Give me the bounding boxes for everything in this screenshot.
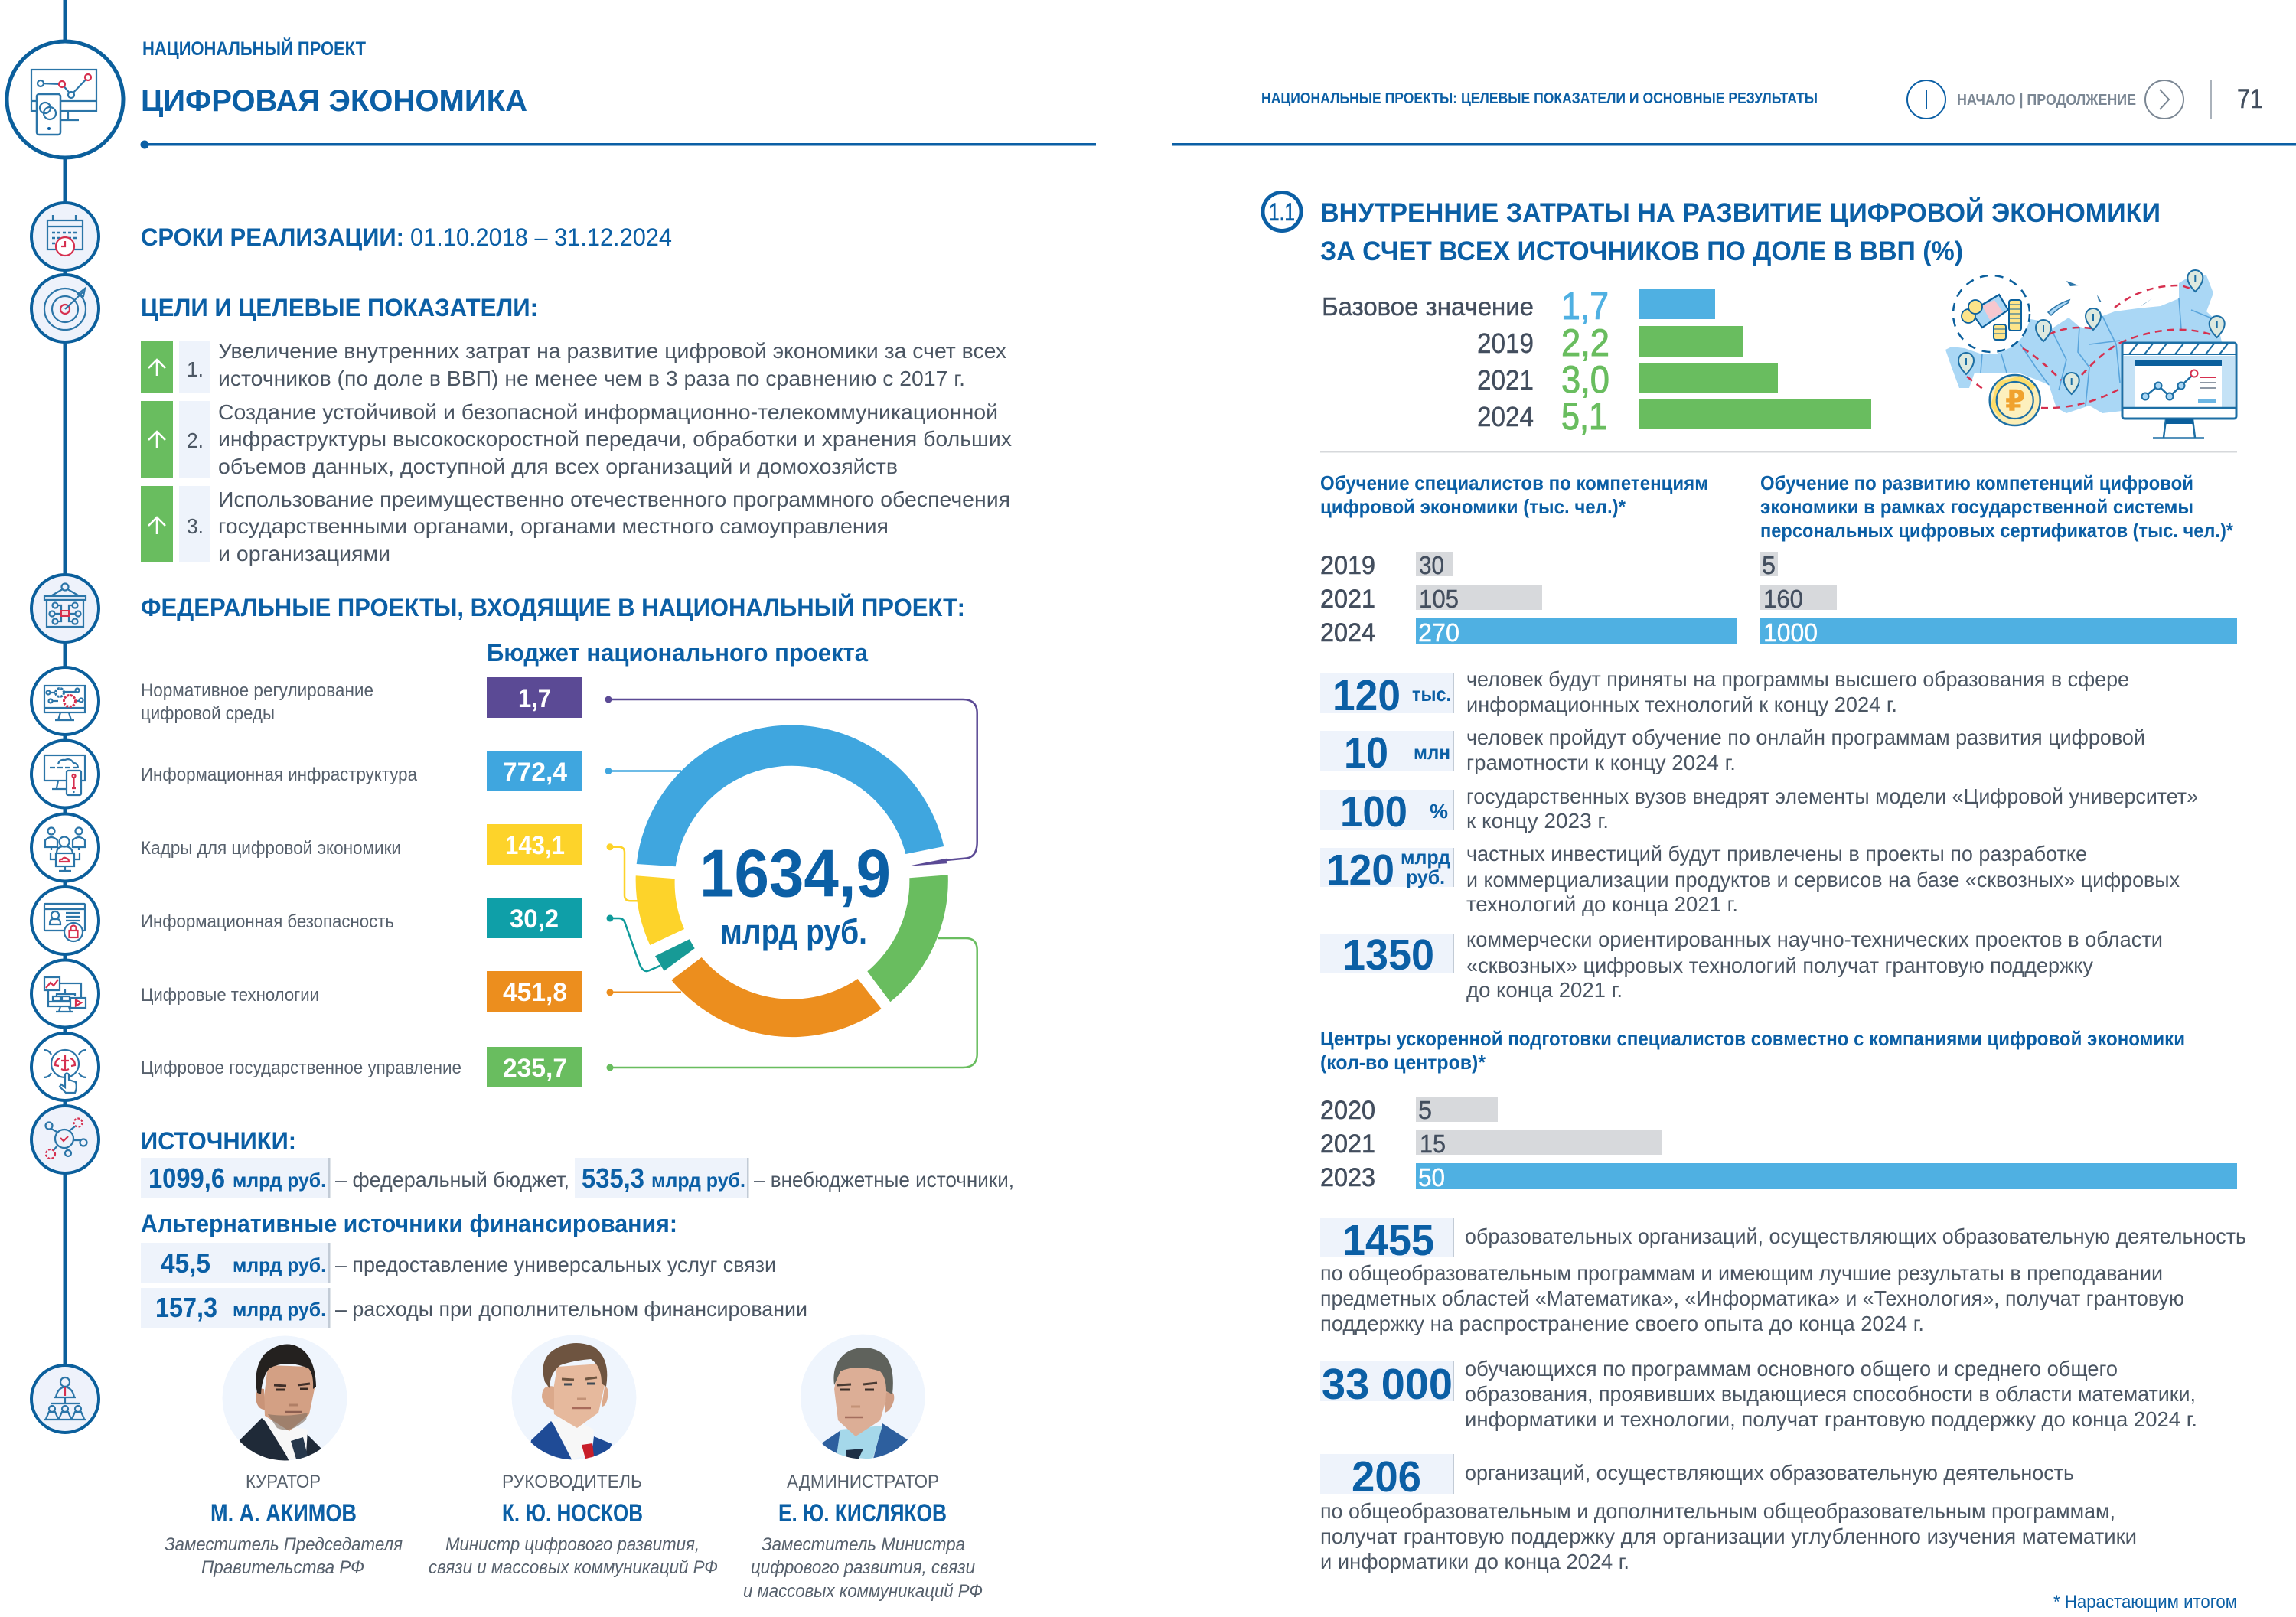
curator: М. А. АКИМОВ [210,1499,357,1527]
stat: 120 thousand: 120 [1332,671,1401,720]
stat: 1455: по общеобразовательным программам и имеющим лучшие результаты в преподавании [1320,1261,2163,1285]
sources row: млрд руб. [651,1169,745,1192]
stat: 100 percent: государственных вузов внедрят элементы модели «Цифровой университет» [1466,784,2198,808]
portrait: Akimov [222,1336,347,1462]
heading: implementation period: СРОКИ РЕАЛИЗАЦИИ: [141,223,404,251]
bar chart: share of GDP: 2024 [1477,401,1534,432]
stat: 206 [1320,1452,2137,1573]
stat: 1350: «сквозных» цифровых технологий получат грантовую поддержку [1466,954,2093,977]
stat: 120 billion: млрд [1401,846,1450,869]
connectors [605,696,977,1071]
head of project: РУКОВОДИТЕЛЬ [502,1472,642,1492]
illustration: map of Russia with monitor: ₽ [2005,384,2025,418]
page header right: НАЧАЛО | ПРОДОЛЖЕНИЕ [1957,92,2136,109]
chart heading: specialists training [1320,471,1708,518]
project labels: Цифровые технологии [141,985,319,1006]
alternative source 1: млрд руб. [233,1254,326,1276]
stat: 10 million: млн [1414,741,1450,764]
stat: 10 million: человек пройдут обучение по онлайн программам развития цифровой [1466,725,2145,749]
head of project: Министр цифрового развития, [445,1534,700,1555]
curator: Правительства РФ [201,1557,364,1578]
bar chart: specialists: 105 [1419,585,1459,613]
budget value boxes: 235,7 [503,1054,567,1083]
goal 2: Создание устойчивой и безопасной информационно-телекоммуникационной [218,400,998,424]
sources row: 535,3 [582,1162,644,1194]
heading: budget: Бюджет национального проекта [487,639,868,667]
project labels: Информационная безопасность [141,911,394,932]
bar chart: share of GDP: 5,1 [1561,395,1607,438]
bar chart: centres: 50 [1418,1163,1445,1192]
stat: 206: 206 [1352,1452,1421,1501]
bar chart: certificates: 5 [1762,551,1776,579]
footnote: * Нарастающим итогом [2053,1592,2237,1612]
stat: 100 percent [1320,784,2198,836]
stat: 100 percent: % [1430,800,1448,823]
budget value boxes: 30,2 [510,905,559,934]
administrator: цифрового развития, связи [751,1557,975,1578]
bar chart: specialists: 30 [1419,551,1444,579]
donut total: 1634,9 [700,836,891,911]
sources row: – внебюджетные источники, [754,1168,1014,1192]
budget value boxes: 772,4 [503,758,567,787]
alternative source 2: – расходы при дополнительном финансировании [335,1297,807,1321]
stat: 120 billion: и коммерциализации продуктов и сервисов на базе «сквозных» цифровых [1466,868,2180,892]
icon: regulation monitor [31,667,99,735]
bar chart: share of GDP: 2019 [1477,328,1534,359]
administrator: Е. Ю. КИСЛЯКОВ [778,1499,947,1527]
stat: 33 000: образования, проявивших выдающиеся способности в области математики, [1465,1382,2196,1406]
project labels: Нормативное регулирование [141,680,373,701]
head of project: связи и массовых коммуникаций РФ [429,1557,718,1578]
budget value boxes: 1,7 [518,684,551,713]
chart heading: certificates: Обучение по развитию компетенций цифровой [1760,471,2193,494]
alternative source 1: 45,5 [161,1247,210,1279]
stat: 206: и информатики до конца 2024 г. [1320,1550,1629,1573]
bar chart: specialists: 2024 [1320,618,1375,647]
bar chart: share of GDP: 3,0 [1561,358,1609,401]
bar chart: centres: 2021 [1320,1130,1375,1159]
bar chart: share of GDP: 2,2 [1561,321,1609,364]
head of project: К. Ю. НОСКОВ [502,1499,643,1527]
page header right [1172,80,2296,145]
bar chart: share of GDP: Базовое значение [1322,292,1534,321]
stat: 206: по общеобразовательным и дополнительным общеобразовательным программам, [1320,1499,2115,1523]
bar chart: centres: 2023 [1320,1163,1375,1192]
project labels: цифровой среды [141,703,275,724]
donut total: млрд руб. [720,912,867,951]
portrait: Noskov [511,1335,637,1462]
heading: sources: ИСТОЧНИКИ: [141,1127,296,1155]
administrator: Заместитель Министра [762,1534,965,1555]
chart heading: acceleration centres [1320,1027,2185,1074]
bar chart: centres [1320,1096,2237,1192]
administrator: и массовых коммуникаций РФ [743,1581,983,1602]
bar chart: certificates [1760,551,2237,647]
goal 2: объемов данных, доступной для всех организаций и домохозяйств [218,455,898,478]
chart heading: acceleration centres: Центры ускоренной подготовки специалистов совместно с компаниями цифровой экономики [1320,1027,2185,1050]
stat: 206: получат грантовую поддержку для организации углубленного изучения математики [1320,1524,2137,1548]
stat: 206: организаций, осуществляющих образовательную деятельность [1465,1461,2074,1485]
sources row: 1099,6 [148,1162,225,1194]
stat: 1455 [1320,1216,2246,1335]
portrait: Kislyakov [801,1335,925,1462]
stat: 100 percent: к концу 2023 г. [1466,809,1609,833]
alternative source 2: млрд руб. [233,1298,326,1321]
timeline spine with icons [7,0,123,1433]
bar chart: specialists: 2021 [1320,585,1375,614]
budget value boxes: 451,8 [503,978,567,1007]
project labels [141,680,461,1078]
curator: КУРАТОР [246,1472,321,1492]
administrator: АДМИНИСТРАТОР [787,1472,939,1492]
sources row: – федеральный бюджет, [335,1168,569,1192]
heading: national project title: ЦИФРОВАЯ ЭКОНОМИКА [141,84,527,118]
heading: implementation period: 01.10.2018 – 31.12.2024 [410,223,672,251]
goal 3: государственными органами, органами местного самоуправления [218,514,889,538]
chart heading: certificates: экономики в рамках государственной системы [1760,495,2193,518]
page header right: НАЦИОНАЛЬНЫЕ ПРОЕКТЫ: ЦЕЛЕВЫЕ ПОКАЗАТЕЛИ И ОСНОВНЫЕ РЕЗУЛЬТАТЫ [1261,90,1818,107]
chart heading: certificates [1760,471,2234,542]
stat: 33 000: информатики и технологии, получат грантовую поддержку до конца 2024 г. [1465,1407,2197,1431]
bar chart: centres: 2020 [1320,1096,1375,1125]
administrator [743,1472,983,1602]
icon: calendar [31,203,99,270]
stat: 33 000: 33 000 [1322,1360,1453,1409]
illustration: map of Russia with monitor [1945,270,2236,438]
icon: personnel [31,814,99,882]
donut total [700,836,891,951]
heading: section 1.1: ВНУТРЕННИЕ ЗАТРАТЫ НА РАЗВИТИЕ ЦИФРОВОЙ ЭКОНОМИКИ [1320,197,2161,228]
goal 2: инфраструктуры высокоскоростной передачи, обработки и хранения больших [218,427,1012,451]
icon: leadership hierarchy [31,1365,99,1433]
bar chart: share of GDP: 2021 [1477,364,1534,396]
head of project [429,1472,718,1578]
heading: national project title [141,37,1096,148]
stat: 120 thousand: информационных технологий к концу 2024 г. [1466,693,1897,716]
heading: federal projects: ФЕДЕРАЛЬНЫЕ ПРОЕКТЫ, ВХОДЯЩИЕ В НАЦИОНАЛЬНЫЙ ПРОЕКТ: [141,594,965,621]
icon: digital economy emblem [7,41,123,158]
bar chart: specialists: 2019 [1320,551,1375,580]
heading: implementation period [141,223,672,251]
stat: 1455: поддержку на распространение своего опыта до конца 2024 г. [1320,1312,1924,1335]
stat: 120 billion: руб. [1406,866,1445,888]
stat: 1455: образовательных организаций, осуществляющих образовательную деятельность [1465,1224,2246,1248]
bar chart: specialists: 270 [1418,618,1459,647]
chart heading: certificates: персональных цифровых сертификатов (тыс. чел.)* [1760,519,2234,542]
goal 2 [141,400,1012,478]
bar chart: certificates: 160 [1763,585,1803,613]
bar chart: share of GDP: 1,7 [1561,285,1609,328]
goal 1 [141,339,1006,393]
goal 2: 2. [187,429,204,452]
project labels: Информационная инфраструктура [141,764,418,785]
goal 1: источников (по доле в ВВП) не менее чем в 3 раза по сравнению с 2017 г. [218,367,965,390]
stat: 1350: 1350 [1342,931,1434,980]
stat: 10 million: грамотности к концу 2024 г. [1466,751,1736,774]
stat: 33 000 [1320,1357,2197,1431]
stat: 1350: коммерчески ориентированных научно-технических проектов в области [1466,927,2163,951]
stat: 1350 [1320,927,2163,1002]
goal 3: 3. [187,514,204,538]
stat: 120 thousand: тыс. [1412,683,1451,706]
heading: section 1.1: 1.1 [1269,198,1295,226]
donut chart [636,725,948,1037]
bar chart: centres: 15 [1420,1130,1446,1158]
stat: 10 million [1320,725,2145,778]
stat: 1455: 1455 [1342,1216,1434,1265]
goal 1: Увеличение внутренних затрат на развитие цифровой экономики за счет всех [218,339,1006,363]
alternative source 2: 157,3 [155,1292,217,1323]
alternative source 2 [141,1288,807,1328]
stat: 120 billion [1320,842,2180,916]
stat: 1350: до конца 2021 г. [1466,978,1623,1002]
icon: infrastructure [31,741,99,808]
budget value boxes [487,677,582,1087]
stat: 1455: предметных областей «Математика», «Информатика» и «Технология», получат грантовую [1320,1286,2184,1310]
curator: Заместитель Председателя [165,1534,403,1555]
sources row [141,1158,1014,1198]
goal 1: 1. [187,357,204,381]
sources row: млрд руб. [233,1169,326,1192]
goal 3: Использование преимущественно отечественного программного обеспечения [218,487,1010,511]
project labels: Цифровое государственное управление [141,1058,461,1078]
chart heading: specialists training: Обучение специалистов по компетенциям [1320,471,1708,494]
icon: digital government [31,1033,99,1100]
alternative source 1 [141,1243,776,1283]
divider [1320,451,2237,453]
stat: 33 000: обучающихся по программам основного общего и среднего общего [1465,1357,2118,1381]
bar chart: share of GDP [1322,285,1871,438]
heading: goals: ЦЕЛИ И ЦЕЛЕВЫЕ ПОКАЗАТЕЛИ: [141,294,538,321]
chart heading: acceleration centres: (кол-во центров)* [1320,1051,1486,1074]
page header right: 71 [2237,84,2263,114]
stat: 120 thousand: человек будут приняты на программы высшего образования в сфере [1466,667,2129,691]
bar chart: centres: 5 [1418,1096,1432,1124]
stat: 10 million: 10 [1344,729,1388,778]
heading: alternative sources: Альтернативные источники финансирования: [141,1210,677,1237]
heading: section 1.1 [1263,193,2161,266]
stat: 120 billion: технологий до конца 2021 г. [1466,892,1738,916]
stat: 100 percent: 100 [1340,787,1407,836]
heading: section 1.1: ЗА СЧЕТ ВСЕХ ИСТОЧНИКОВ ПО ДОЛЕ В ВВП (%) [1320,236,1963,266]
stat: 120 thousand [1320,667,2129,720]
icon: information security [31,887,99,954]
goal 3 [141,486,1010,566]
goal 3: и организациями [218,542,390,566]
icon: federal projects board [31,575,99,642]
curator [165,1472,403,1578]
alternative source 1: – предоставление универсальных услуг связи [335,1253,776,1276]
heading: national project title: НАЦИОНАЛЬНЫЙ ПРОЕКТ [142,37,366,60]
stat: 120 billion: частных инвестиций будут привлечены в проекты по разработке [1466,842,2087,866]
stat: 120 billion: 120 [1326,846,1394,895]
budget value boxes: 143,1 [505,831,565,860]
project labels: Кадры для цифровой экономики [141,838,401,859]
bar chart: certificates: 1000 [1763,618,1818,647]
icon: digital technologies [31,960,99,1027]
icon: sources network [31,1106,99,1173]
bar chart: specialists [1320,551,1737,647]
icon: target [31,275,99,342]
chart heading: specialists training: цифровой экономики (тыс. чел.)* [1320,495,1626,518]
